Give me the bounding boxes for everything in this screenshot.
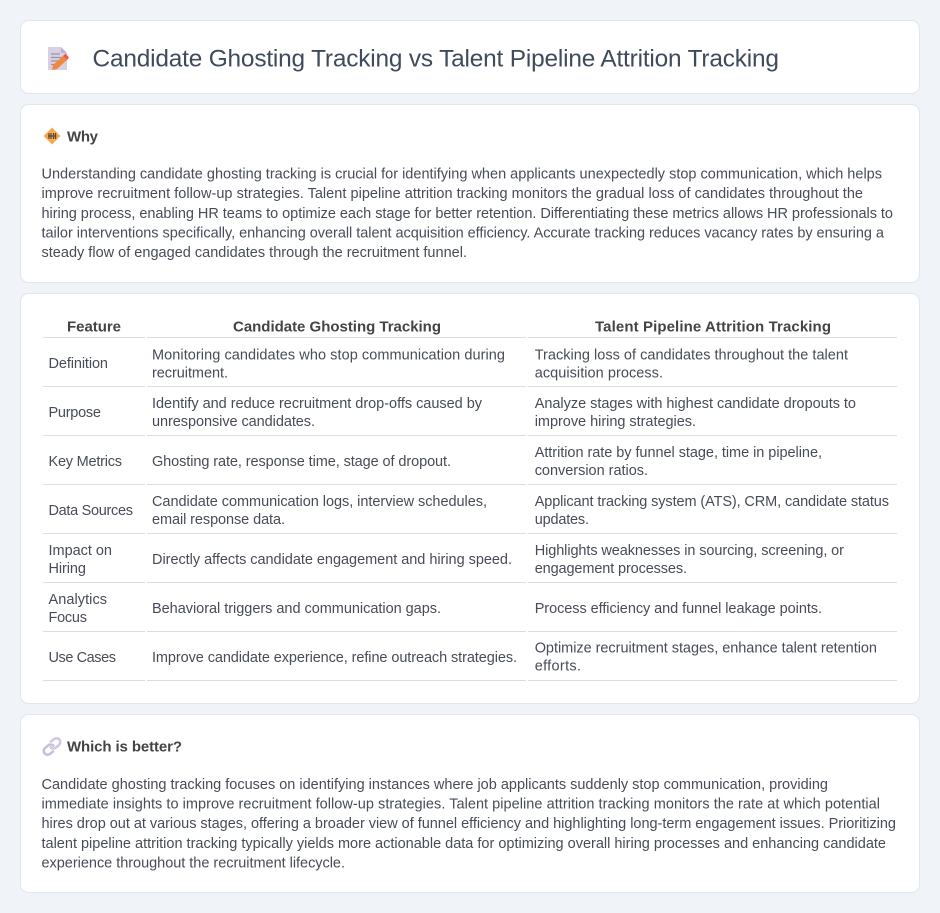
table row: data sources: updates. — [535, 512, 589, 528]
table row: data sources: Data Sources — [48, 503, 133, 519]
text block: which is better paragraph: immediate insights to improve recruitment follow-up strategies. Talent pipeline attrition tracking monitors the rate at which potential — [42, 797, 880, 813]
text block: why paragraph: Understanding candidate ghosting tracking is crucial for identifying when applicants unexpectedly stop communication, which helps — [42, 167, 882, 183]
table row: impact on hiring: Hiring — [48, 561, 86, 577]
table row: purpose: Purpose — [48, 405, 101, 421]
table row: purpose: unresponsive candidates. — [152, 414, 315, 430]
text block: which is better paragraph: hires drop out at various stages, offering a broader view of funnel efficiency and highlighting long-term engagement issues. Prioritizing — [42, 816, 896, 832]
text block: why paragraph: steady flow of engaged candidates through the recruitment funnel. — [42, 245, 467, 261]
table row: key metrics: Attrition rate by funnel stage, time in pipeline, — [535, 445, 822, 461]
table row: key metrics: Key Metrics — [48, 454, 122, 470]
table row: purpose — [43, 396, 897, 436]
table row: use cases: Use Cases — [48, 650, 116, 666]
table row: impact on hiring: Impact on — [48, 543, 112, 559]
table row: analytics focus: Process efficiency and funnel leakage points. — [535, 601, 822, 617]
table row: impact on hiring: Directly affects candidate engagement and hiring speed. — [152, 552, 512, 568]
text block: why paragraph: improve recruitment follow-up strategies. Talent pipeline attrition tracking monitors the gradual loss of candidates throughout the — [42, 186, 863, 202]
table row: use cases: efforts. — [535, 659, 581, 675]
table row: key metrics: Ghosting rate, response time, stage of dropout. — [152, 454, 451, 470]
table row: definition — [43, 347, 897, 387]
table row: purpose: Analyze stages with highest candidate dropouts to — [535, 396, 856, 412]
panel: comparison table — [20, 294, 920, 704]
table row: analytics focus: Analytics — [48, 592, 107, 608]
title: Candidate Ghosting Tracking vs Talent Pipeline Attrition Tracking — [92, 46, 779, 73]
table header row: Feature — [67, 319, 121, 336]
table row: analytics focus: Focus — [48, 610, 87, 626]
table row: impact on hiring — [43, 543, 897, 583]
icon: warning diamond — [44, 128, 60, 144]
icon: document with pencil — [48, 47, 69, 70]
heading: which is better: Which is better? — [67, 739, 182, 756]
text block: which is better paragraph: Candidate ghosting tracking focuses on identifying instances where job applicants suddenly stop communication, providing — [42, 777, 828, 793]
table row: data sources: Applicant tracking system (ATS), CRM, candidate status — [535, 494, 889, 510]
table row: impact on hiring: engagement processes. — [535, 561, 687, 577]
panel: which is better — [20, 714, 920, 892]
table row: use cases: Improve candidate experience, refine outreach strategies. — [152, 650, 517, 666]
table header row: Candidate Ghosting Tracking — [233, 319, 441, 336]
table header row: Talent Pipeline Attrition Tracking — [595, 319, 831, 336]
table row: purpose: improve hiring strategies. — [535, 414, 696, 430]
table row: key metrics: conversion ratios. — [535, 463, 648, 479]
panel: header — [20, 20, 920, 94]
table row: purpose: Identify and reduce recruitment drop-offs caused by — [152, 396, 483, 412]
text block: which is better paragraph: experience throughout the recruitment lifecycle. — [42, 855, 345, 871]
panel: why — [20, 104, 920, 282]
text block: why paragraph: hiring process, enabling HR teams to optimize each stage for better retention. Differentiating these metrics allows HR professionals to — [42, 206, 893, 222]
table row: key metrics — [43, 445, 897, 485]
table row: definition: Definition — [48, 356, 108, 372]
icon: chain link — [44, 738, 60, 755]
heading: why: Why — [67, 129, 99, 146]
table row: data sources: email response data. — [152, 512, 285, 528]
table row: data sources: Candidate communication logs, interview schedules, — [152, 494, 487, 510]
table row: data sources — [43, 494, 897, 534]
table row: analytics focus — [43, 592, 897, 632]
table row: definition: recruitment. — [152, 365, 228, 381]
text block: which is better paragraph: talent pipeline attrition tracking typically yields more actionable data for optimizing overall hiring processes and enhancing candidate — [42, 836, 886, 852]
table row: definition: Monitoring candidates who stop communication during — [152, 347, 505, 363]
table row: definition: Tracking loss of candidates throughout the talent — [535, 347, 848, 363]
table row: analytics focus: Behavioral triggers and communication gaps. — [152, 601, 441, 617]
table row: use cases: Optimize recruitment stages, enhance talent retention — [535, 641, 877, 657]
text block: why paragraph: tailor interventions specifically, enhancing overall talent acquisition efficiency. Accurate tracking reduces vacancy rates by ensuring a — [42, 225, 885, 241]
table header row — [43, 319, 897, 338]
text block: why paragraph — [42, 167, 893, 261]
table row: definition: acquisition process. — [535, 365, 663, 381]
table row: impact on hiring: Highlights weaknesses in sourcing, screening, or — [535, 543, 844, 559]
table row: use cases — [43, 641, 897, 681]
text block: which is better paragraph — [42, 777, 896, 871]
